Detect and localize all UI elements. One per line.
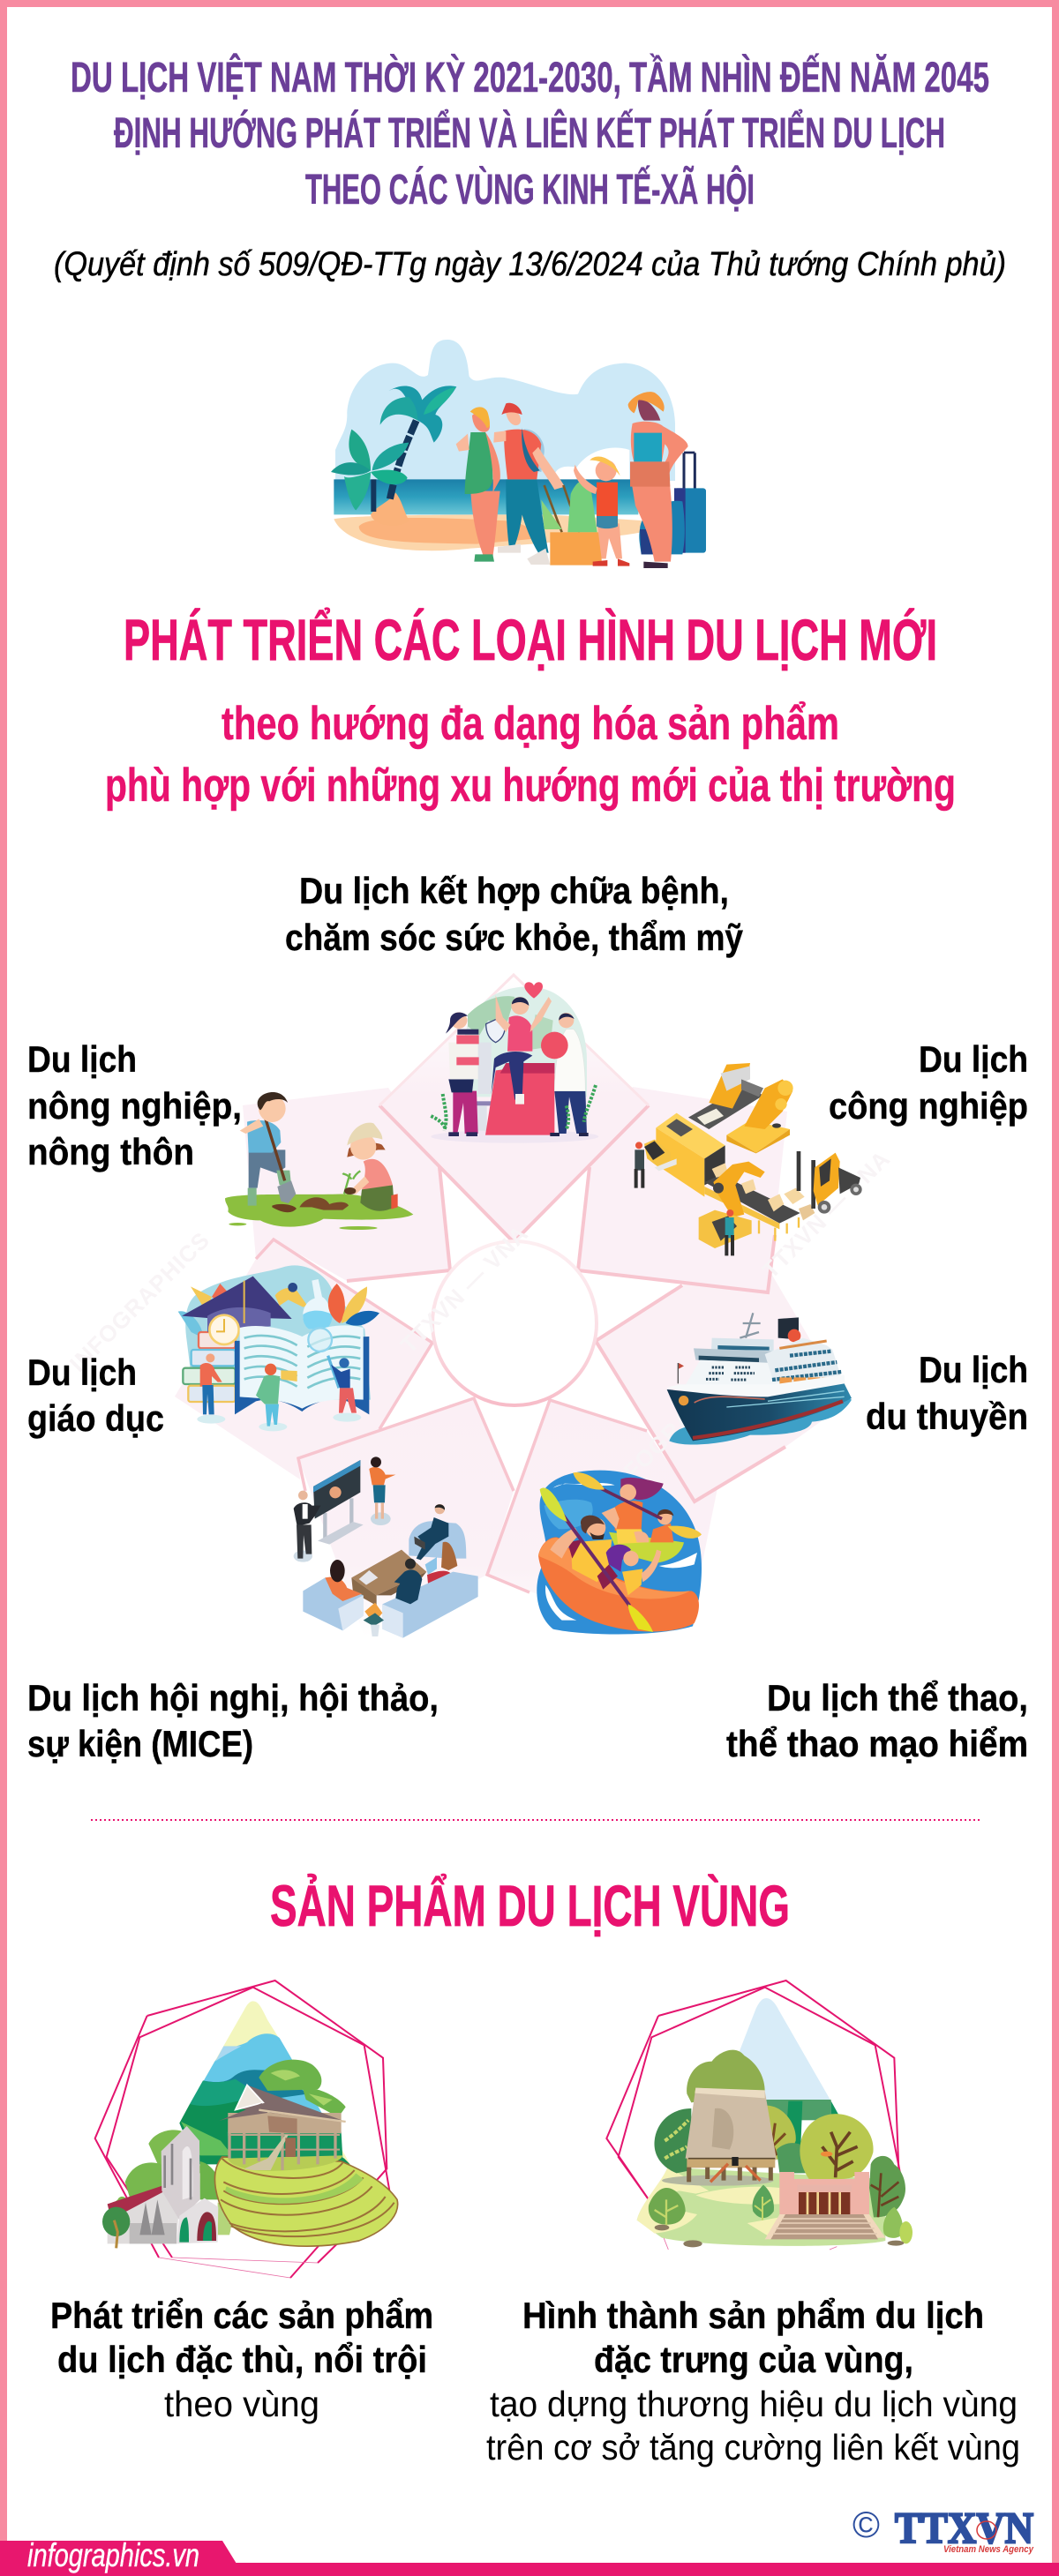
mountain <box>179 2001 350 2164</box>
text: specialised products: theo vùng <box>164 2384 319 2424</box>
title <box>71 53 989 213</box>
lower console <box>699 1210 752 1248</box>
woman at right with laptop <box>425 1542 457 1584</box>
stack of books <box>183 1332 236 1402</box>
back sofa with man <box>409 1504 466 1560</box>
boy <box>240 1092 296 1206</box>
trees behind <box>654 2050 874 2179</box>
lower robot arm <box>713 1162 765 1217</box>
clock <box>209 1315 239 1344</box>
workers <box>635 1142 734 1255</box>
label: MICE: Du lịch hội nghị, hội thảo, <box>27 1677 439 1719</box>
museum building <box>765 2172 885 2239</box>
lower conveyor with boxes <box>704 1175 800 1224</box>
text: regional signature products: tạo dựng thương hiệu du lịch vùng <box>490 2384 1018 2424</box>
label: industry: công nghiệp <box>829 1085 1028 1127</box>
child <box>574 457 629 566</box>
flower diagram background <box>64 846 927 1708</box>
illustration: industrial tourism <box>635 1063 862 1255</box>
heptagon frames <box>606 1981 900 2250</box>
man in navy <box>394 1559 422 1604</box>
leaves <box>431 1094 446 1131</box>
label: sports: thể thao mạo hiểm <box>726 1723 1028 1764</box>
mother and suitcases <box>628 392 706 568</box>
label: agriculture: nông thôn <box>27 1131 194 1172</box>
watermarks <box>64 846 927 1708</box>
petal: MICE <box>298 1398 514 1636</box>
central athlete <box>492 995 552 1105</box>
watermarks: TTXVN — VNA <box>757 1145 895 1284</box>
illustration: education tourism <box>178 1265 379 1431</box>
label: cruise <box>866 1349 1028 1437</box>
heart <box>524 982 543 999</box>
label: sports: Du lịch thể thao, <box>767 1677 1028 1719</box>
presentation board <box>313 1460 364 1545</box>
label: agriculture: Du lịch <box>27 1038 137 1080</box>
stilt house <box>219 2085 346 2171</box>
presenter man <box>294 1491 320 1562</box>
heptagon frames <box>95 1981 390 2278</box>
woman holding jar <box>446 1012 479 1136</box>
label: industry <box>829 1038 1028 1127</box>
woman in orange <box>325 1560 362 1601</box>
right side trees <box>869 2156 905 2217</box>
man with paddle <box>550 1516 618 1590</box>
syringe <box>478 1043 492 1094</box>
label: MICE <box>27 1677 439 1764</box>
title: THEO CÁC VÙNG KINH TẾ-XÃ HỘI <box>305 165 755 213</box>
child <box>650 1509 673 1542</box>
large machine <box>656 1113 725 1158</box>
label: cruise: Du lịch <box>919 1349 1028 1390</box>
potted plant <box>364 1603 382 1623</box>
text: regional signature products: đặc trưng của vùng, <box>594 2339 913 2380</box>
petal: sports <box>487 1400 717 1641</box>
front paddle <box>556 1506 629 1606</box>
front girl <box>606 1545 661 1595</box>
luggage and plants <box>541 480 602 565</box>
logo: TTXVN: Vietnam News Agency <box>943 2544 1034 2555</box>
illustration: northern highlands region <box>95 1981 398 2278</box>
logo: TTXVN: © <box>852 2504 880 2545</box>
person over book <box>275 1288 307 1307</box>
woman at back <box>602 1478 664 1544</box>
watermarks: INFOGRAPHICS <box>601 1352 752 1501</box>
petal: industry <box>578 1087 787 1292</box>
watermarks: TTXVN — VNA <box>395 1220 533 1359</box>
illustration: family on the beach <box>331 340 706 568</box>
table <box>351 1550 426 1595</box>
petal: agriculture <box>243 1088 450 1281</box>
communal thatched house <box>686 2088 777 2182</box>
front sofas <box>382 1572 478 1638</box>
label: agriculture: nông nghiệp, <box>27 1085 242 1127</box>
dotted divider <box>91 1819 980 1821</box>
graduation cap <box>182 1277 292 1319</box>
subheading: diversify products <box>105 698 956 812</box>
petal: education <box>175 1239 432 1479</box>
text: regional signature products: Hình thành sản phẩm du lịch <box>522 2295 984 2336</box>
petal: cruise <box>596 1268 847 1501</box>
small trees <box>649 2185 913 2247</box>
girl <box>342 1123 398 1211</box>
label: health tourism: Du lịch kết hợp chữa bệnh, <box>299 870 729 911</box>
illustration: cruise ship <box>667 1313 852 1445</box>
labels left and right <box>27 1038 1028 1764</box>
label: education: giáo dục <box>27 1397 164 1439</box>
robot arm and base <box>726 1120 790 1153</box>
petal: health <box>379 975 649 1242</box>
watermarks: INFOGRAPHICS <box>64 1226 215 1377</box>
label: health tourism <box>285 870 744 958</box>
text: specialised products: Phát triển các sản phẩm <box>50 2295 433 2336</box>
terraced hill <box>214 2157 398 2246</box>
logo: TTXVN <box>852 2503 1034 2555</box>
back paddle <box>594 1485 662 1519</box>
footer bar: infographics.vn <box>27 2537 199 2573</box>
doctor <box>541 1013 589 1136</box>
heading: regional products: SẢN PHẨM DU LỊCH VÙNG <box>270 1873 790 1938</box>
forklift <box>799 1151 862 1214</box>
upper conveyor <box>688 1085 763 1129</box>
podium <box>485 1063 554 1135</box>
logo: TTXVN: TTXVN <box>895 2503 1033 2552</box>
shield <box>486 1020 506 1043</box>
stone church <box>102 2126 218 2248</box>
illustration: agriculture tourism <box>225 1092 413 1230</box>
people <box>197 1353 361 1431</box>
illustration: central highlands region <box>606 1981 913 2250</box>
label: industry: Du lịch <box>919 1038 1028 1080</box>
text: regional signature products <box>486 2295 1020 2467</box>
illustration: kayaking <box>537 1471 702 1634</box>
label: education: Du lịch <box>27 1352 137 1393</box>
sky triangle <box>721 1998 837 2111</box>
text: specialised products <box>50 2295 433 2424</box>
label: agriculture <box>27 1038 242 1172</box>
orange raft <box>538 1537 699 1631</box>
label: MICE: sự kiện (MICE) <box>27 1723 253 1764</box>
text: specialised products: du lịch đặc thù, nổi trội <box>57 2339 427 2380</box>
woman in green <box>456 407 500 562</box>
label: cruise: du thuyền <box>866 1396 1028 1437</box>
label: education <box>27 1352 164 1439</box>
trees <box>125 2060 346 2235</box>
label: health tourism: chăm sóc sức khỏe, thẩm mỹ <box>285 917 744 958</box>
flask and leaves <box>303 1279 331 1329</box>
ground <box>637 2168 885 2246</box>
subheading: diversify products: theo hướng đa dạng hóa sản phẩm <box>222 698 839 750</box>
open book <box>235 1337 369 1414</box>
presenter woman <box>369 1456 395 1525</box>
man with backpack <box>493 403 565 565</box>
palm trees <box>331 386 456 512</box>
illustration: MICE tourism <box>294 1456 478 1638</box>
footer bar <box>0 2537 1059 2576</box>
illustration: health tourism <box>431 982 598 1143</box>
label: sports <box>726 1677 1028 1764</box>
text: regional signature products: trên cơ sở tăng cường liên kết vùng <box>486 2427 1020 2467</box>
